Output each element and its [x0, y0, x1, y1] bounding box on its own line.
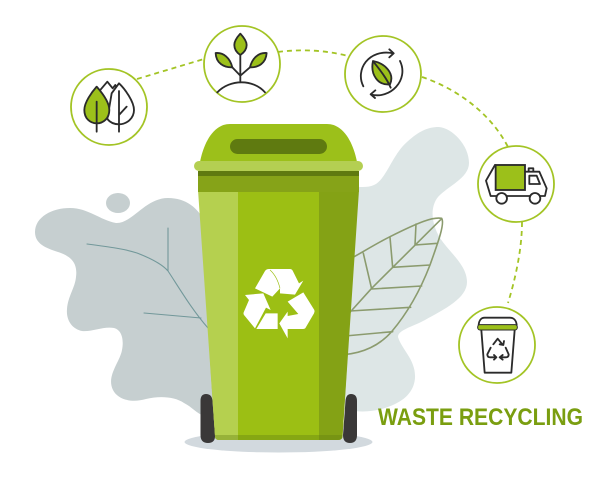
- icon circle: leaf with cycle arrows: [345, 36, 421, 112]
- lid slot: [230, 139, 327, 154]
- bin body: [198, 175, 359, 440]
- dashed connector path: [137, 50, 522, 303]
- blob: right pale background shape: [330, 127, 469, 411]
- blob: left grey background shape: [35, 193, 222, 420]
- title: waste recycling: WASTE RECYCLING: [378, 404, 583, 431]
- right wheel: [343, 394, 357, 443]
- body dark right strip: [319, 190, 359, 440]
- leaf veins on left blob: [87, 228, 208, 328]
- outlined leaf behind bin: [343, 218, 443, 355]
- blob: small grey dot: [106, 193, 130, 213]
- body bottom shade: [215, 435, 342, 440]
- icon circle: trees: [71, 69, 147, 145]
- dark collar shadow: [198, 171, 359, 176]
- icon circle: small recycling bin: [459, 307, 535, 383]
- left wheel: [200, 394, 215, 443]
- icon circle: sprout: [204, 26, 280, 102]
- upper collar band: [198, 171, 359, 192]
- icon circle: garbage truck: [478, 146, 554, 222]
- body light left strip: [198, 190, 238, 440]
- green recycling bin: [194, 124, 363, 440]
- bin lid dome: [200, 124, 357, 162]
- lid lip: [194, 161, 363, 171]
- recycling symbol: [243, 269, 315, 338]
- bin shadow: [184, 432, 372, 452]
